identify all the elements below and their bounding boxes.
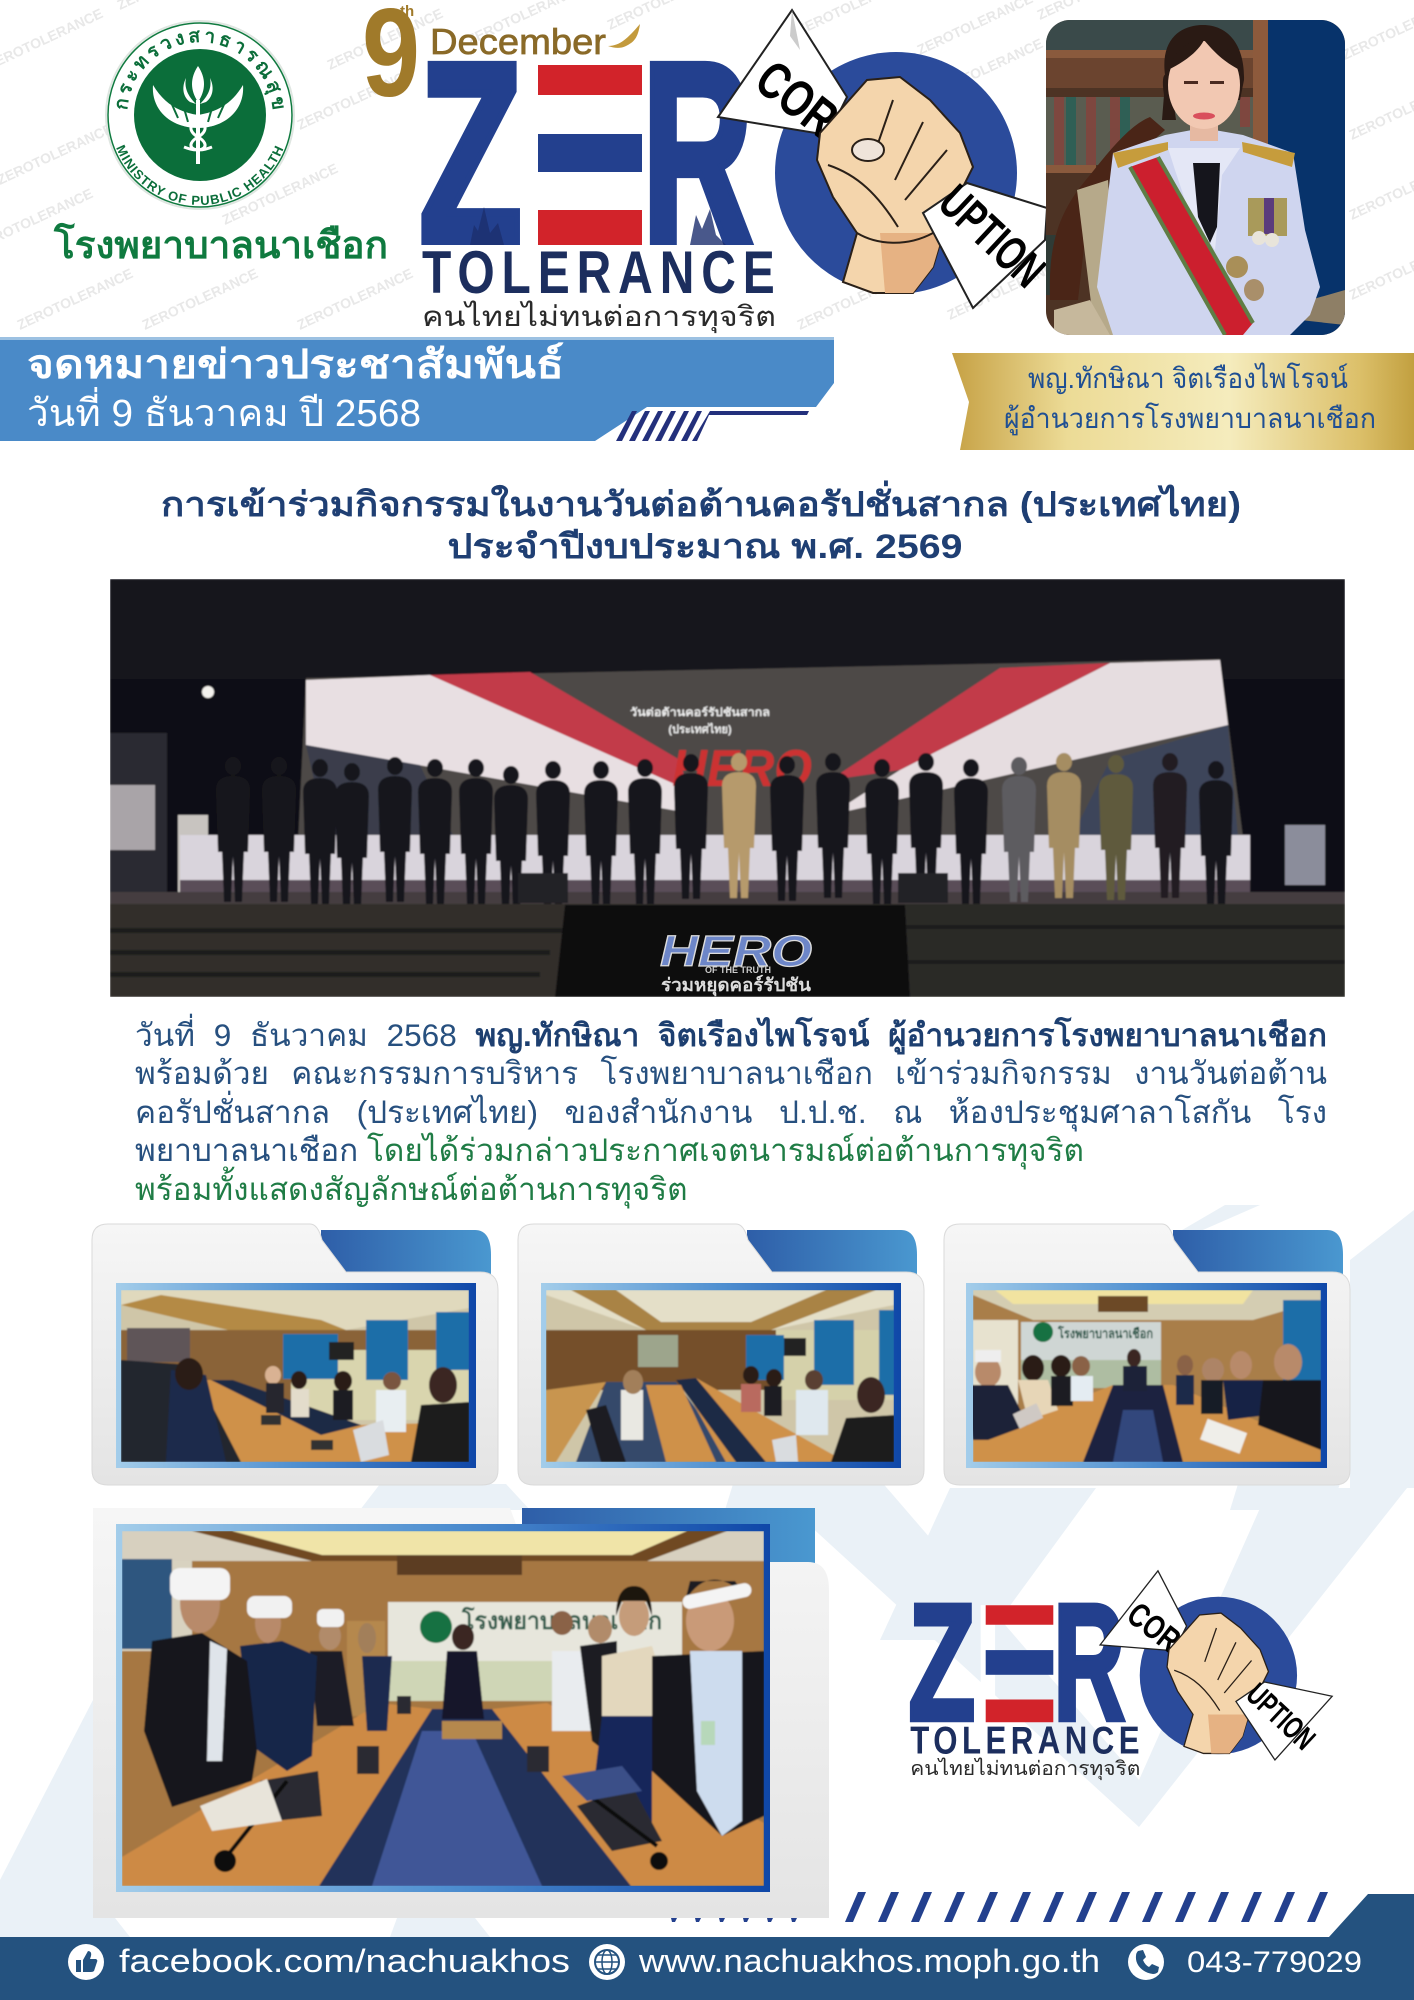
director position: ผู้อำนวยการโรงพยาบาลนาเชือก [1004,402,1376,436]
watermark pattern: ZEROTOLERANCE [220,160,340,228]
small zero tolerance logo: UPTION [1240,1676,1322,1757]
small zero tolerance logo: คนไทยไม่ทนต่อการทุจริต [910,1757,1140,1781]
small zero tolerance logo: TOLERANCE [910,1719,1140,1762]
website address: www.nachuakhos.moph.go.th [638,1943,1100,1979]
main zero tolerance logo: R [642,9,753,296]
photo: stage ceremony: HERO [672,740,812,798]
logo: ministry of public health emblem: กระทรวงสาธารณสุข [116,30,284,110]
body text: คอรัปชั่นสากล (ประเทศไทย) ของสำนักงาน ป.ป.ช. ณ ห้องประชุมศาลาโสกัน โรง [135,1094,1327,1130]
photo: stage ceremony: HERO [660,927,812,976]
body text: พยาบาลนาเชือก โดยได้ร่วมกล่าวประกาศเจตนารมณ์ต่อต้านการทุจริต [135,1132,1084,1168]
banner date: วันที่ 9 ธันวาคม ปี 2568 [27,387,421,435]
watermark pattern: ZEROTOLERANCE [295,265,415,333]
icon: globe [589,1944,625,1980]
title [161,480,1241,566]
main zero tolerance logo [419,9,1056,334]
portrait of director [1046,20,1345,335]
watermark pattern: ZEROTOLERANCE [15,265,135,333]
watermark pattern: ZEROTOLERANCE [140,265,260,333]
date mark: 9th December: December [430,21,606,62]
watermark pattern: ZEROTOLERANCE [795,265,915,333]
main zero tolerance logo: TOLERANCE [422,239,775,306]
photo: meeting room 2 [546,1290,894,1462]
watermark pattern [0,0,1414,333]
date mark: 9th December: th [400,3,414,20]
logo: ministry of public health emblem: MINISTRY OF PUBLIC HEALTH [116,144,284,205]
header banner [0,337,834,441]
watermark pattern: ZEROTOLERANCE [925,35,1045,103]
photo: stage ceremony [110,579,1345,997]
photo: meeting room 3 [968,1290,1321,1462]
photo: stage ceremony: ร่วมหยุดคอร์รัปชัน [661,974,812,997]
body text: วันที่ 9 ธันวาคม 2568 พญ.ทักษิณา จิตเรืองไพโรจน์ ผู้อำนวยการโรงพยาบาลนาเชือก [135,1017,1327,1053]
director name: พญ.ทักษิณา จิตเรืองไพโรจน์ [1028,362,1348,394]
main zero tolerance logo: E [520,9,622,296]
watermark pattern: ZEROTOLERANCE [295,65,415,133]
body text: พร้อมทั้งแสดงสัญลักษณ์ต่อต้านการทุจริต [135,1171,688,1207]
photo: stage ceremony: วันต่อต้านคอร์รัปชันสากล [630,706,770,719]
small zero tolerance logo: Z [908,1569,975,1755]
icon: phone [1128,1944,1164,1980]
photo: stage ceremony: OF THE TRUTH [705,965,771,975]
title: ประจำปีงบประมาณ พ.ศ. 2569 [448,528,962,566]
watermark pattern: ZEROTOLERANCE [325,5,445,73]
photo: meeting room 3: โรงพยาบาลนาเชือก [1057,1325,1153,1341]
main zero tolerance logo: Z [419,10,522,295]
photo: meeting room 1 [121,1290,469,1462]
main zero tolerance logo: คนไทยไม่ทนต่อการทุจริต [422,301,776,334]
small zero tolerance logo: R [1053,1570,1125,1756]
footer stripes [671,1892,1328,1922]
body text [135,1014,1327,1208]
card 1 folder [92,1224,498,1485]
photo: group gesture [122,1531,764,1886]
banner stripes [616,411,809,441]
body text: พร้อมด้วย คณะกรรมการบริหาร โรงพยาบาลนาเชือก เข้าร่วมกิจกรรม งานวันต่อต้าน [135,1055,1327,1091]
phone number: 043-779029 [1187,1946,1362,1979]
card 3 folder [944,1224,1350,1485]
main zero tolerance logo: UPTION [929,174,1056,298]
icon: facebook like [68,1944,104,1980]
small zero tolerance logo: CORR [1120,1596,1202,1671]
small zero tolerance logo [908,1569,1332,1781]
small zero tolerance logo: E [974,1570,1041,1756]
card 2 folder [518,1224,924,1485]
banner heading: จดหมายข่าวประชาสัมพันธ์ [27,342,564,387]
footer bar [0,1894,1414,2000]
hospital name: โรงพยาบาลนาเชือก [53,222,388,267]
watermark pattern: ZEROTOLERANCE [945,255,1065,323]
main zero tolerance logo: CORR [745,49,872,166]
facebook address: facebook.com/nachuakhos [119,1943,570,1979]
background geometric shapes [0,1205,1414,1937]
large card folder [93,1508,829,1918]
logo: ministry of public health emblem [105,20,295,210]
date mark: 9th December [362,0,640,123]
photo: group gesture: โรงพยาบาลนาเชือก [461,1606,662,1635]
title: การเข้าร่วมกิจกรรมในงานวันต่อต้านคอรัปชั่นสากล (ประเทศไทย) [161,480,1241,524]
director name ribbon [952,353,1414,450]
photo: stage ceremony: (ประเทศไทย) [668,722,732,736]
